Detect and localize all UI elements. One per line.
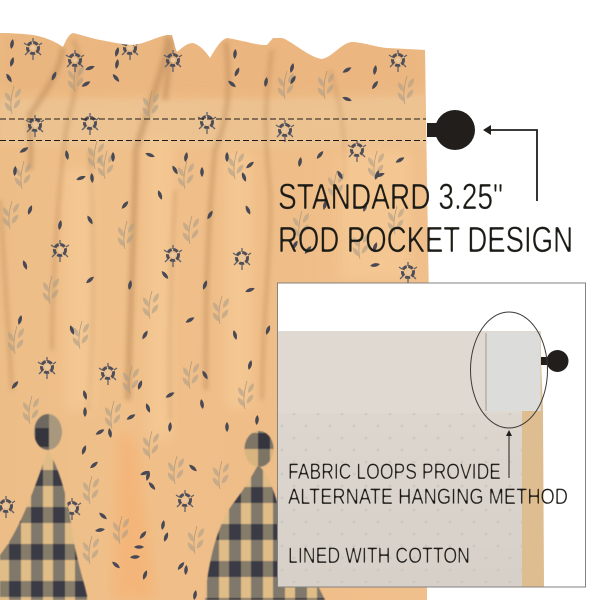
inset panel: back of curtain: [278, 283, 586, 587]
curtain fabric: [0, 0, 430, 600]
gingham right point: [205, 431, 325, 600]
panel frame: [278, 283, 586, 587]
curtain panel: [0, 0, 430, 600]
dashed stitch lines of the rod pocket: [0, 119, 426, 140]
gingham left point: [0, 414, 88, 600]
heading: rod pocket design: STANDARD 3.25": [278, 176, 503, 217]
inset text: fabric loops: FABRIC LOOPS PROVIDE: [288, 459, 501, 484]
inset text: fabric loops: [288, 459, 568, 509]
lining fold band: [278, 331, 541, 413]
heading: rod pocket design: [278, 176, 573, 260]
small rod finial: [541, 350, 568, 372]
callout arrow: [506, 430, 512, 478]
fabric loop: [485, 333, 540, 411]
arrow to rod: [483, 125, 537, 201]
dark leaves: [5, 39, 405, 600]
right tab: [244, 431, 274, 467]
cotton lining: [278, 331, 523, 586]
callout ellipse: [470, 312, 548, 428]
curtain rod finial: [427, 110, 475, 150]
printed floral motifs: [0, 38, 417, 600]
inset text: lining: LINED WITH COTTON: [288, 543, 470, 568]
ruffle and fold shading: [0, 30, 430, 600]
left tab: [34, 414, 62, 450]
flowers: [0, 38, 417, 520]
tan curtain edge: [522, 332, 544, 586]
pale sprigs: [1, 64, 416, 564]
